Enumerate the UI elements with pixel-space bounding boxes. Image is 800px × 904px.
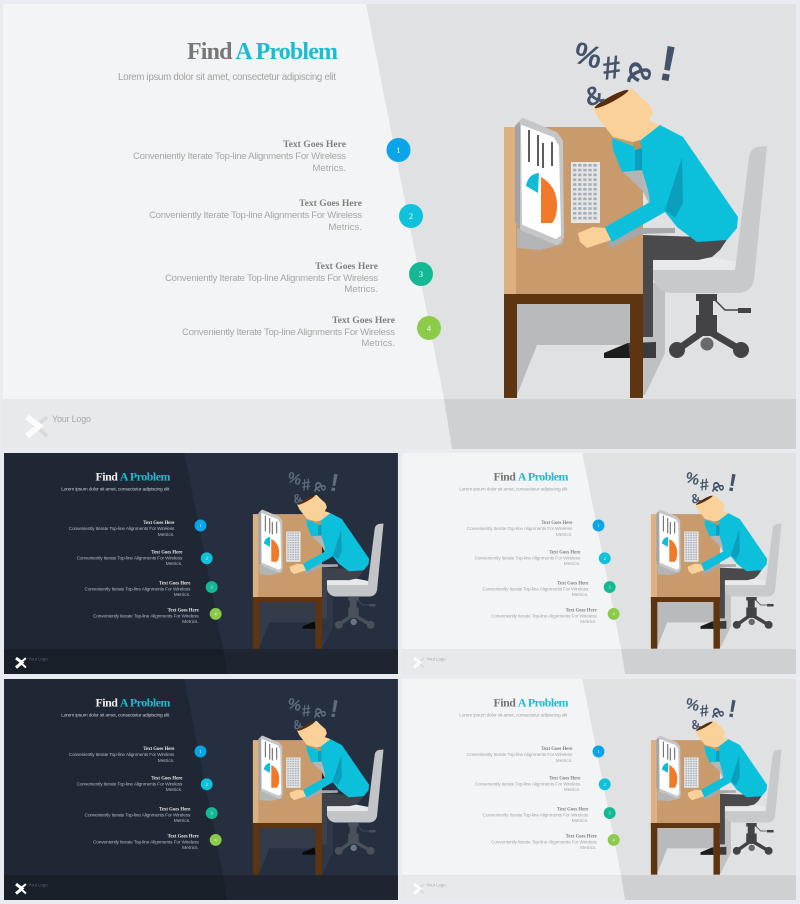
item 2 [149, 198, 363, 233]
marker 1: 1 [200, 749, 202, 754]
item 1 [69, 747, 175, 764]
marker 3 [604, 581, 616, 593]
item 4: Metrics. [580, 845, 597, 851]
item 1 [133, 139, 347, 174]
item 3 [85, 808, 191, 824]
illustration: frustrated man at desk: ! [655, 35, 681, 93]
logo: Your Logo [28, 883, 48, 888]
logo: Your Logo [28, 657, 48, 662]
marker 3 [604, 807, 616, 819]
illustration: frustrated man at desk: & [708, 480, 727, 494]
item 1: Metrics. [312, 163, 346, 174]
marker 1 [593, 746, 604, 757]
illustration: frustrated man at desk: & [689, 716, 702, 733]
illustration: frustrated man at desk: % [684, 695, 702, 715]
marker 3: 3 [419, 270, 423, 279]
marker 4: 4 [215, 837, 217, 842]
illustration: frustrated man at desk: ! [328, 470, 341, 498]
slide: small light top [402, 453, 796, 674]
item 1: Text Goes Here [283, 139, 347, 150]
item 2: Text Goes Here [151, 550, 182, 555]
illustration: frustrated man at desk: & [310, 706, 329, 720]
item 3: Text Goes Here [557, 808, 588, 813]
item 4: Conveniently Iterate Top-line Alignments For Wireless [491, 839, 597, 845]
item 3: Metrics. [174, 818, 190, 824]
illustration: frustrated man at desk: % [570, 35, 606, 76]
subtitle: Lorem ipsum dolor sit amet, consectetur adipiscing elit [61, 713, 170, 719]
item 4: Text Goes Here [566, 834, 597, 839]
item 4 [491, 834, 597, 851]
item 3 [483, 808, 589, 824]
illustration: frustrated man at desk: # [301, 476, 312, 495]
title: Find A Problem [187, 39, 338, 65]
item 1: Metrics. [556, 532, 572, 538]
marker 3: 3 [609, 811, 611, 816]
logo: Your Logo [426, 657, 446, 662]
item 1: Conveniently Iterate Top-line Alignments For Wireless [69, 752, 175, 758]
item 2: Metrics. [328, 222, 362, 233]
item 4: Text Goes Here [168, 608, 199, 613]
marker 1: 1 [396, 146, 400, 155]
illustration: frustrated man at desk: ! [328, 696, 341, 724]
item 3: Metrics. [344, 284, 378, 295]
slide: large light [3, 4, 796, 449]
illustration: frustrated man at desk: & [291, 490, 304, 507]
marker 2: 2 [409, 212, 413, 221]
item 1: Conveniently Iterate Top-line Alignments For Wireless [467, 752, 573, 758]
illustration: frustrated man at desk: & [620, 59, 660, 88]
marker 1 [195, 520, 206, 531]
illustration: frustrated man at desk [651, 695, 782, 875]
slide: small light bottom [402, 679, 796, 900]
item 1: Text Goes Here [541, 521, 572, 526]
item 3: Conveniently Iterate Top-line Alignments For Wireless [85, 587, 191, 593]
illustration: frustrated man at desk [651, 469, 782, 649]
marker 2 [399, 204, 423, 228]
item 1: Metrics. [158, 532, 174, 538]
item 2: Metrics. [166, 561, 182, 567]
logo [414, 657, 446, 668]
illustration: frustrated man at desk [253, 695, 384, 875]
subtitle: Lorem ipsum dolor sit amet, consectetur adipiscing elit [459, 713, 568, 719]
item 4: Conveniently Iterate Top-line Alignments For Wireless [93, 613, 199, 619]
item 1: Conveniently Iterate Top-line Alignments For Wireless [467, 526, 573, 532]
item 4: Metrics. [182, 619, 199, 625]
item 2 [77, 550, 183, 567]
item 2: Text Goes Here [299, 198, 363, 209]
item 1: Metrics. [158, 758, 174, 764]
item 4 [93, 834, 199, 851]
marker 1 [195, 746, 206, 757]
item 2: Text Goes Here [549, 550, 580, 555]
item 3: Text Goes Here [315, 261, 379, 272]
illustration: frustrated man at desk: # [699, 702, 710, 721]
item 2 [77, 776, 183, 793]
marker 4 [608, 834, 620, 846]
item 1 [467, 747, 573, 764]
item 3: Metrics. [572, 818, 588, 824]
illustration: frustrated man at desk: & [689, 490, 702, 507]
item 1: Text Goes Here [143, 521, 174, 526]
marker 4: 4 [427, 324, 431, 333]
marker 1 [386, 138, 410, 162]
logo [27, 414, 91, 436]
marker 3: 3 [609, 585, 611, 590]
item 2: Conveniently Iterate Top-line Alignments For Wireless [77, 555, 183, 561]
illustration: frustrated man at desk: # [301, 702, 312, 721]
marker 2 [599, 778, 611, 790]
item 2: Conveniently Iterate Top-line Alignments For Wireless [475, 555, 581, 561]
title: Find A Problem [95, 695, 171, 709]
item 2: Text Goes Here [549, 776, 580, 781]
marker 1: 1 [200, 523, 202, 528]
marker 1 [593, 520, 604, 531]
marker 3: 3 [211, 585, 213, 590]
illustration: frustrated man at desk: % [286, 695, 304, 715]
item 4: Conveniently Iterate Top-line Alignments For Wireless [491, 613, 597, 619]
illustration: frustrated man at desk: ! [726, 696, 739, 724]
item 3: Text Goes Here [159, 808, 190, 813]
illustration: frustrated man at desk: % [684, 469, 702, 489]
subtitle: Lorem ipsum dolor sit amet, consectetur adipiscing elit [61, 487, 170, 493]
item 1: Metrics. [556, 758, 572, 764]
logo [16, 657, 48, 668]
item 2: Conveniently Iterate Top-line Alignments For Wireless [475, 781, 581, 787]
marker 4: 4 [613, 611, 615, 616]
marker 2: 2 [206, 556, 208, 561]
illustration: frustrated man at desk: & [310, 480, 329, 494]
illustration: frustrated man at desk [504, 35, 767, 398]
marker 4 [417, 316, 441, 340]
slide: small dark top [4, 453, 398, 674]
title: Find A Problem [95, 469, 171, 483]
logo: Your Logo [52, 414, 91, 424]
item 4 [93, 608, 199, 625]
illustration: frustrated man at desk: # [699, 476, 710, 495]
item 3: Conveniently Iterate Top-line Alignments For Wireless [85, 813, 191, 819]
item 4: Metrics. [361, 338, 395, 349]
marker 4: 4 [215, 611, 217, 616]
item 4: Metrics. [580, 619, 597, 625]
marker 3 [206, 807, 218, 819]
marker 2: 2 [604, 556, 606, 561]
illustration: frustrated man at desk: & [291, 716, 304, 733]
slide: small dark bottom [4, 679, 398, 900]
item 1: Conveniently Iterate Top-line Alignments For Wireless [133, 151, 346, 162]
title: Find A Problem [493, 695, 569, 709]
item 3: Metrics. [174, 592, 190, 598]
item 2: Conveniently Iterate Top-line Alignments For Wireless [149, 210, 362, 221]
item 4: Conveniently Iterate Top-line Alignments For Wireless [93, 839, 199, 845]
marker 4 [608, 608, 620, 620]
item 1: Text Goes Here [541, 747, 572, 752]
illustration: frustrated man at desk: ! [726, 470, 739, 498]
marker 3 [206, 581, 218, 593]
item 3: Conveniently Iterate Top-line Alignments For Wireless [483, 813, 589, 819]
item 3: Text Goes Here [557, 582, 588, 587]
marker 2 [201, 552, 213, 564]
item 1: Text Goes Here [143, 747, 174, 752]
item 2 [475, 550, 581, 567]
item 4: Metrics. [182, 845, 199, 851]
title: Find A Problem [493, 469, 569, 483]
item 3: Metrics. [572, 592, 588, 598]
illustration: frustrated man at desk: & [708, 706, 727, 720]
item 1: Conveniently Iterate Top-line Alignments For Wireless [69, 526, 175, 532]
marker 4 [210, 834, 222, 846]
marker 4 [210, 608, 222, 620]
logo: Your Logo [426, 883, 446, 888]
marker 2: 2 [604, 782, 606, 787]
logo [414, 883, 446, 894]
item 2: Metrics. [166, 787, 182, 793]
illustration: frustrated man at desk: % [286, 469, 304, 489]
marker 1: 1 [598, 749, 600, 754]
marker 3 [409, 262, 433, 286]
item 3 [165, 261, 379, 295]
subtitle: Lorem ipsum dolor sit amet, consectetur adipiscing elit [459, 487, 568, 493]
illustration: frustrated man at desk [253, 469, 384, 649]
item 2: Text Goes Here [151, 776, 182, 781]
item 4 [491, 608, 597, 625]
item 3 [85, 582, 191, 598]
logo [16, 883, 48, 894]
item 2: Metrics. [564, 787, 580, 793]
marker 4: 4 [613, 837, 615, 842]
illustration: frustrated man at desk: # [600, 48, 623, 87]
item 3: Text Goes Here [159, 582, 190, 587]
item 3: Conveniently Iterate Top-line Alignments For Wireless [483, 587, 589, 593]
marker 2 [201, 778, 213, 790]
item 4: Conveniently Iterate Top-line Alignments For Wireless [182, 327, 395, 338]
item 1 [467, 521, 573, 538]
marker 2: 2 [206, 782, 208, 787]
item 4: Text Goes Here [566, 608, 597, 613]
marker 3: 3 [211, 811, 213, 816]
item 3: Conveniently Iterate Top-line Alignments For Wireless [165, 273, 378, 284]
marker 2 [599, 552, 611, 564]
item 2 [475, 776, 581, 793]
item 2: Conveniently Iterate Top-line Alignments For Wireless [77, 781, 183, 787]
marker 1: 1 [598, 523, 600, 528]
item 4 [182, 315, 396, 349]
illustration: frustrated man at desk: & [580, 78, 608, 113]
item 4: Text Goes Here [168, 834, 199, 839]
item 2: Metrics. [564, 561, 580, 567]
item 3 [483, 582, 589, 598]
item 1 [69, 521, 175, 538]
subtitle: Lorem ipsum dolor sit amet, consectetur adipiscing elit [118, 72, 336, 83]
item 4: Text Goes Here [332, 315, 396, 326]
